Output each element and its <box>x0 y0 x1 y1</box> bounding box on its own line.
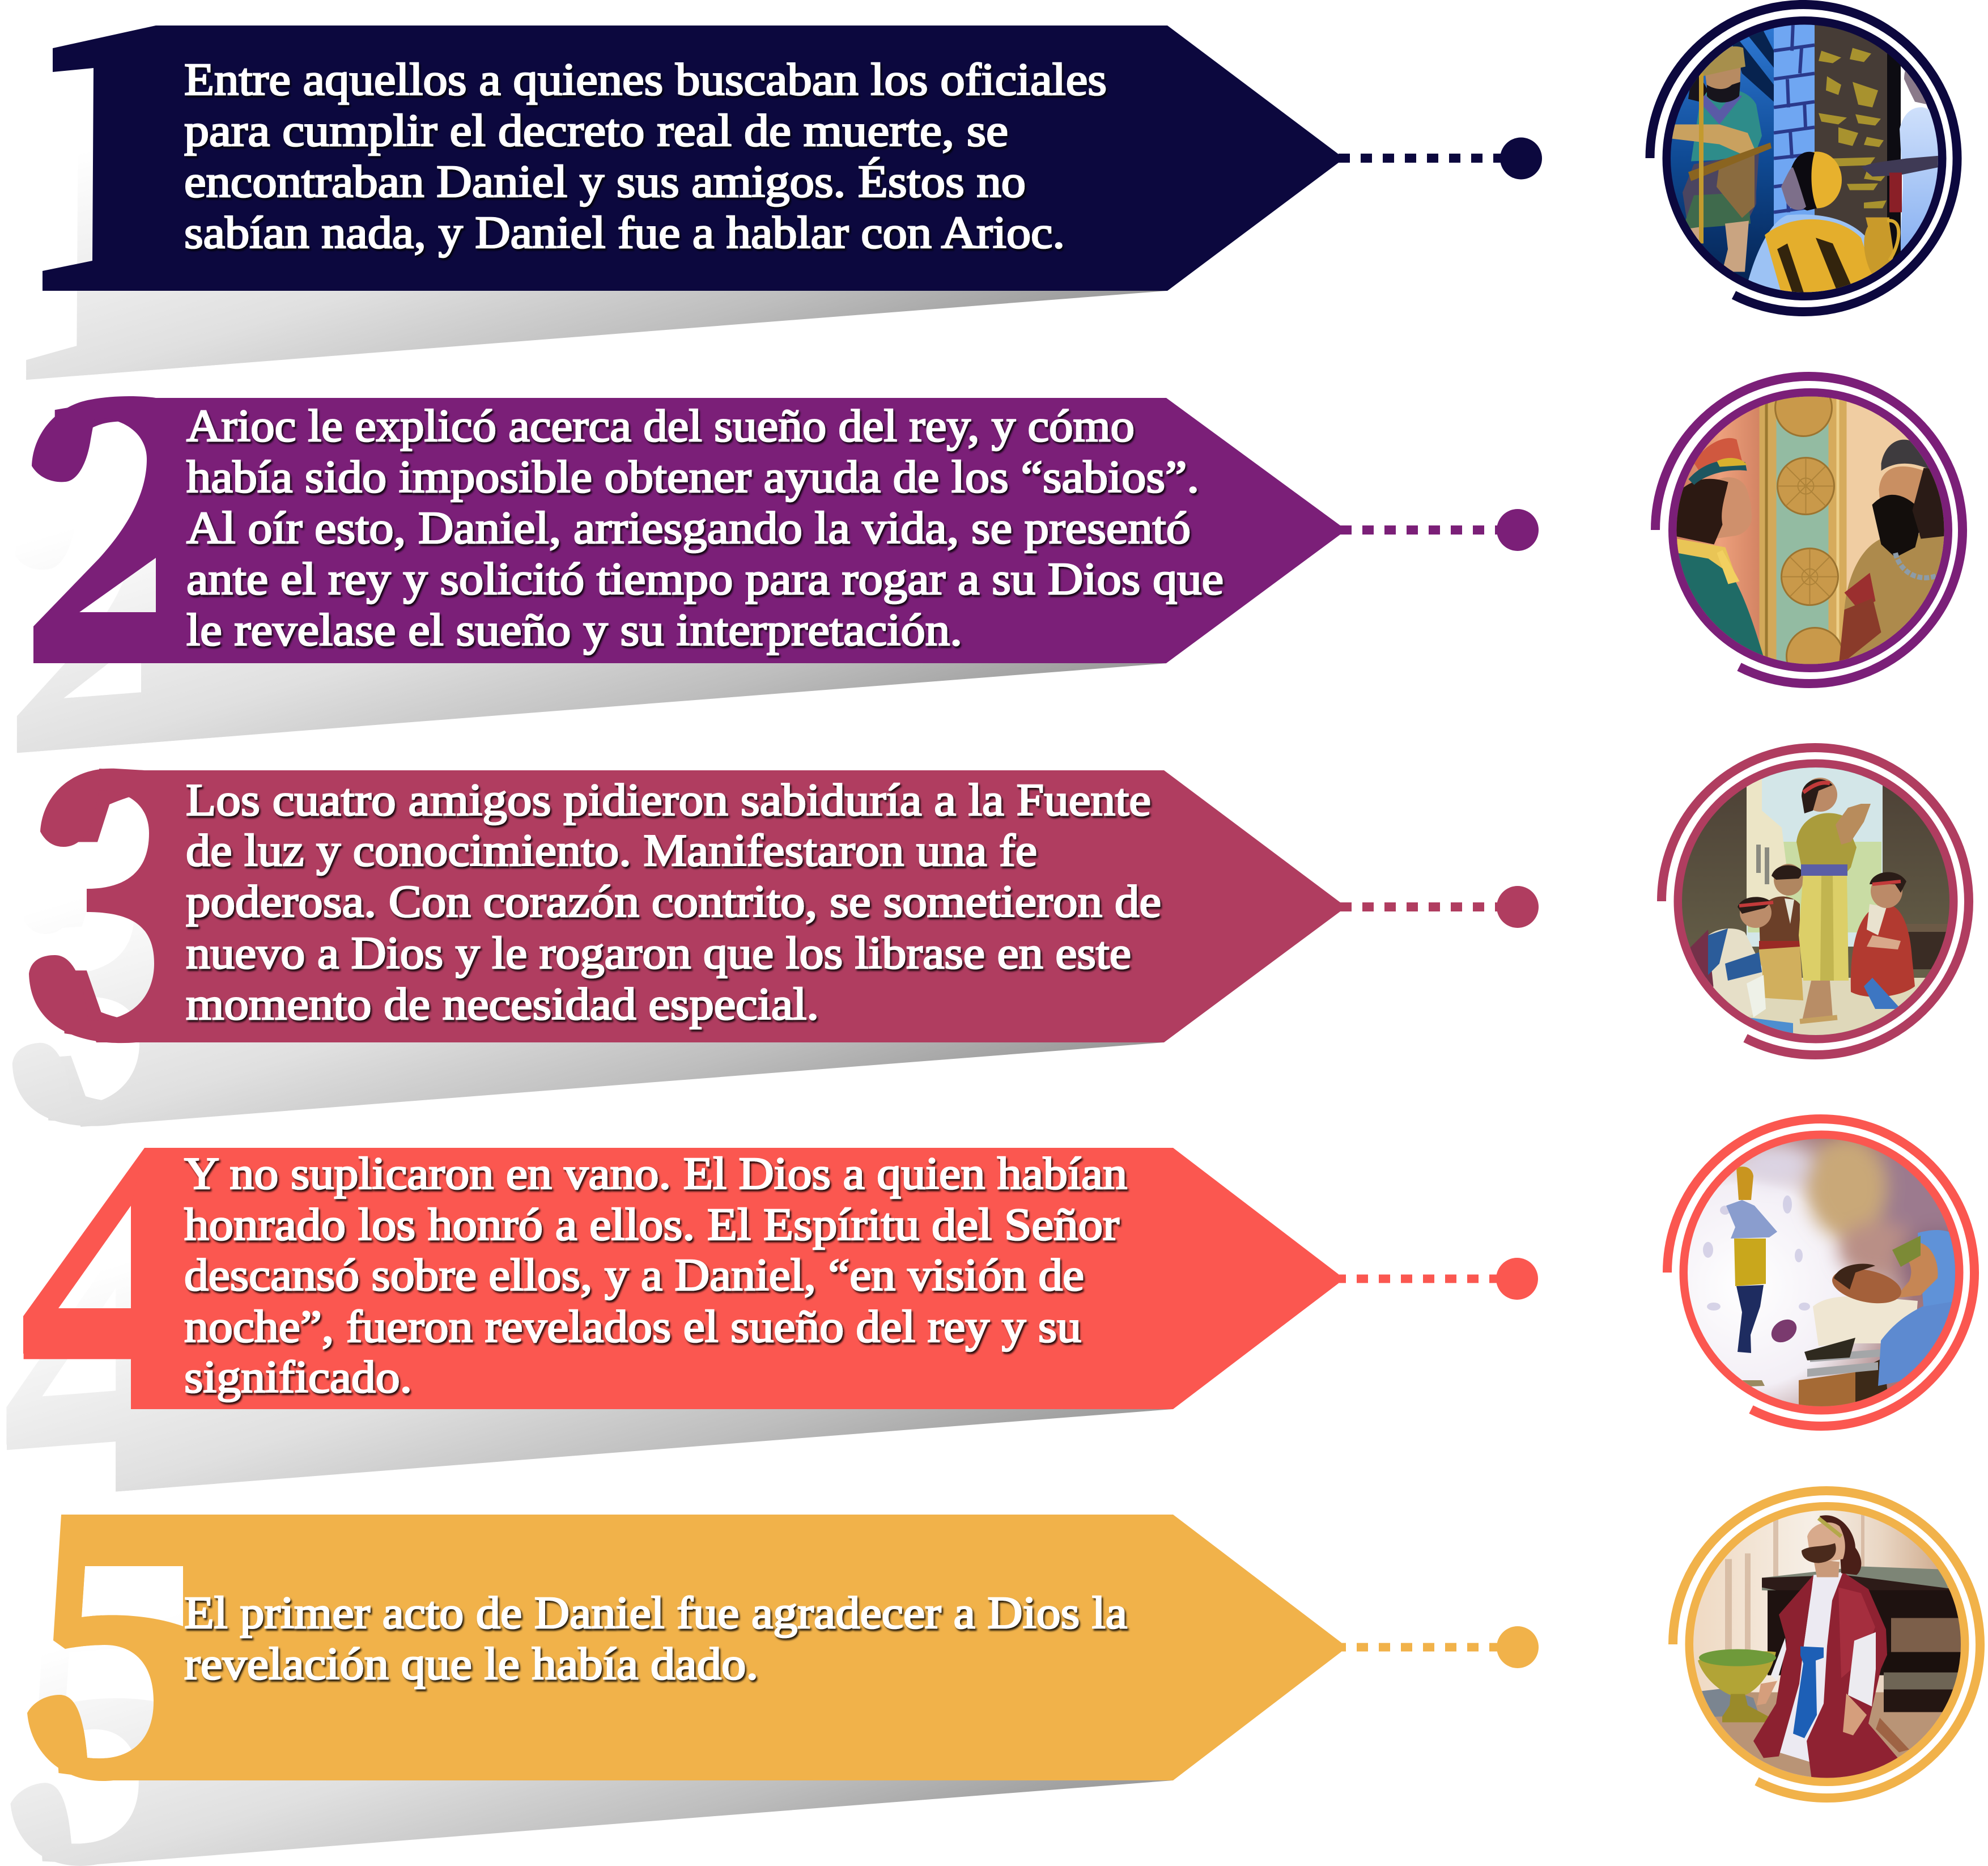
text 3: de luz y conocimiento. Manifestaron una fe <box>186 825 1037 876</box>
text 2: Arioc le explicó acerca del sueño del rey, y cómo <box>186 400 1135 451</box>
text 3: Los cuatro amigos pidieron sabiduría a la Fuente <box>186 774 1151 825</box>
panel 1 <box>43 26 1339 291</box>
panel 3 <box>87 769 1340 1042</box>
middle man <box>1759 896 1800 952</box>
man: sleeves and hands <box>1848 1632 1876 1706</box>
text 5: revelación que le había dado. <box>184 1638 758 1689</box>
rings 2 <box>1655 376 1962 684</box>
center man <box>1745 214 1895 295</box>
panel 5 <box>53 1515 1341 1780</box>
text 4: significado. <box>184 1351 412 1402</box>
row 3 <box>12 684 1969 1213</box>
left man <box>1708 928 1765 1017</box>
connector 2 <box>1340 509 1539 551</box>
text 1: para cumplir el decreto real de muerte, se <box>184 105 1008 156</box>
rings 1 <box>1650 5 1957 312</box>
connector 3 <box>1340 886 1539 928</box>
shadow 2 <box>7 311 1166 839</box>
connector 1 <box>1339 137 1542 179</box>
man: red robe right <box>1807 1572 1898 1780</box>
digit 4: 4 <box>18 1065 217 1493</box>
rings 5 <box>1673 1491 1980 1798</box>
row 5 <box>11 1469 1980 1866</box>
connector 5 <box>1335 1626 1539 1668</box>
text 4: honrado los honró a ellos. El Espíritu del Señor <box>184 1199 1119 1250</box>
text 2: había sido imposible obtener ayuda de los “sabios”. <box>186 451 1199 502</box>
rings 4 <box>1667 1119 1974 1426</box>
right man <box>1851 904 1915 997</box>
left guard <box>1691 88 1762 161</box>
man: head <box>1820 1515 1861 1575</box>
text 3: nuevo a Dios y le rogaron que los librase en este <box>186 927 1131 978</box>
text 5: El primer acto de Daniel fue agradecer a Dios la <box>184 1587 1127 1638</box>
digit 3: 3 <box>40 684 324 1123</box>
text 2: Al oír esto, Daniel, arriesgando la vida, se presentó <box>186 502 1191 553</box>
table <box>1904 930 1955 969</box>
shadow 3: 3 <box>23 750 312 1212</box>
text 4 <box>184 1148 1127 1402</box>
panel 4 <box>131 1148 1339 1409</box>
shadow 5 <box>11 1469 1173 1866</box>
shadow 4: 4 <box>1 1140 203 1585</box>
photo 5: Daniel kneeling in thanks <box>1691 1508 1965 1780</box>
photo 1: guard and Daniel <box>1668 23 1940 295</box>
man: red robe left <box>1753 1575 1813 1758</box>
text 5 <box>184 1587 1127 1689</box>
panel 2 <box>156 398 1340 663</box>
rings 3 <box>1662 748 1969 1055</box>
bowl <box>1698 1651 1776 1695</box>
table <box>1799 1369 1878 1409</box>
standing man <box>1799 873 1849 981</box>
statue <box>1736 1167 1753 1200</box>
connector 4 <box>1335 1258 1538 1300</box>
right man <box>1900 107 1940 272</box>
photo 4: Daniel dreams of the statue <box>1685 1136 1980 1409</box>
table <box>1762 1567 1963 1598</box>
text 3: momento de necesidad especial. <box>186 978 819 1029</box>
shadow 1: 1 <box>51 14 249 463</box>
text 1: Entre aquellos a quienes buscaban los oficiales <box>184 54 1107 105</box>
shadow 2: 2 <box>7 382 257 839</box>
jug <box>1864 218 1894 277</box>
man: white tunic <box>1765 1572 1843 1766</box>
text 2: le revelase el sueño y su interpretación. <box>186 604 962 655</box>
row 2 <box>7 311 1962 839</box>
sleeping man <box>1813 1296 1918 1346</box>
photo 2: Arioc and Daniel at a door <box>1674 380 1949 685</box>
text 4: Y no suplicaron en vano. El Dios a quien habían <box>184 1148 1127 1199</box>
shadow 3 <box>12 684 1164 1213</box>
digit 2: 2 <box>23 311 270 749</box>
text 1 <box>184 54 1107 258</box>
shadow 4 <box>1 1065 1173 1585</box>
shadow 1 <box>26 0 1167 465</box>
text 4: descansó sobre ellos, y a Daniel, “en visión de <box>184 1249 1084 1300</box>
text 4: noche”, fueron revelados el sueño del rey y su <box>184 1301 1081 1352</box>
text 3 <box>186 774 1161 1029</box>
man: sash <box>1793 1646 1824 1738</box>
text 2 <box>186 400 1224 655</box>
photo 3: friends praying <box>1680 765 1955 1040</box>
row 4 <box>1 1065 1980 1585</box>
text 1: encontraban Daniel y sus amigos. Éstos no <box>184 156 1026 207</box>
row 1 <box>26 0 1957 465</box>
text 3: poderosa. Con corazón contrito, se sometieron de <box>186 876 1161 927</box>
left man <box>1674 553 1764 667</box>
digit 5: 5 <box>34 1469 302 1852</box>
text 2: ante el rey y solicitó tiempo para rogar a su Dios que <box>186 553 1224 604</box>
right man <box>1842 531 1949 667</box>
text 1: sabían nada, y Daniel fue a hablar con Arioc. <box>184 207 1065 258</box>
